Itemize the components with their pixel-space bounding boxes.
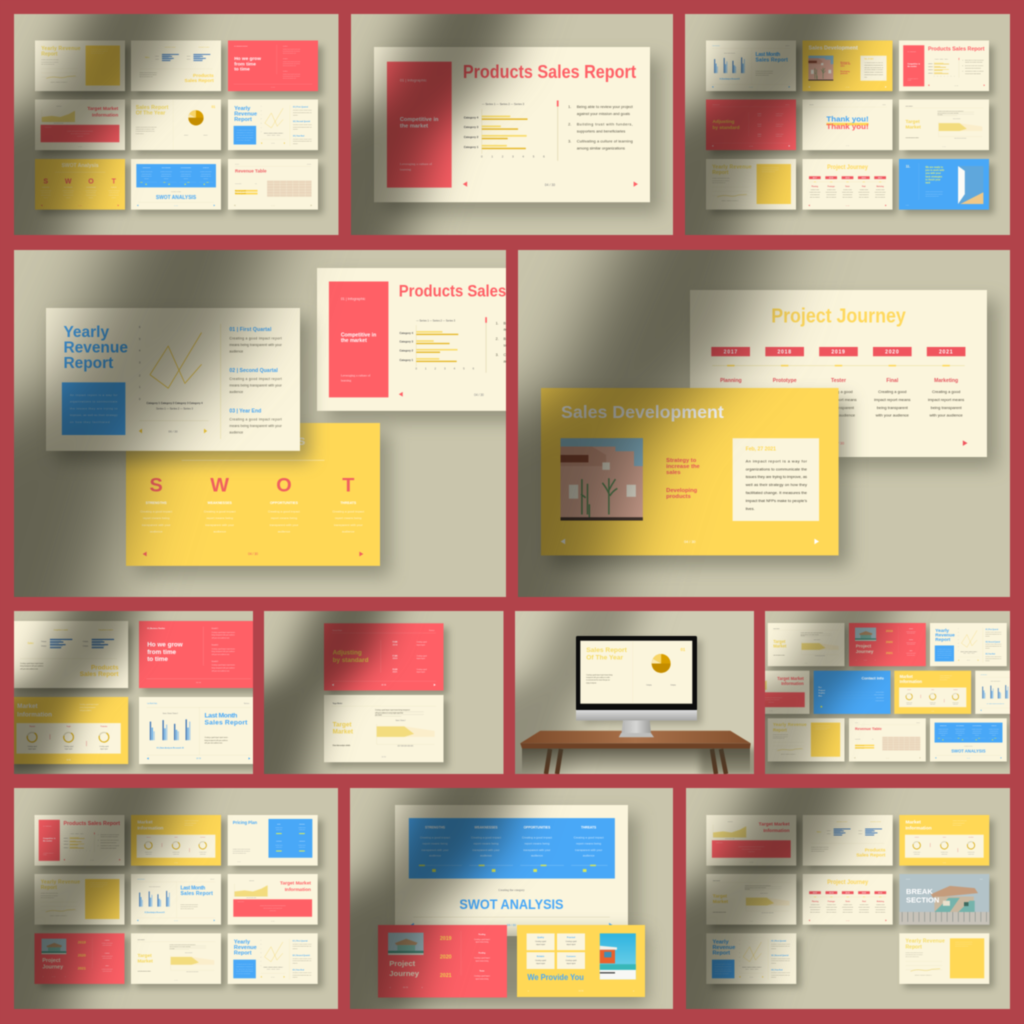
monitor xyxy=(576,636,697,737)
slide: Products Sales Report xyxy=(374,47,650,202)
slide: Target Market xyxy=(899,100,989,150)
slide: Sales Development xyxy=(541,388,839,555)
slide: Revenue Table xyxy=(228,159,318,210)
screen: Sales Report Of The Year xyxy=(580,641,692,704)
slide: Target Market Information xyxy=(733,671,810,714)
slide: Project Journey red xyxy=(378,925,507,998)
slide: Ho we grow from time to time xyxy=(228,40,318,91)
slide: Yearly Revenue Report xyxy=(46,308,300,451)
slide: Target Market Information xyxy=(706,815,796,866)
slide: Project Journey red xyxy=(34,933,124,984)
panel: overview of slides, bottom right xyxy=(573,733,1010,1024)
slide: Market Information xyxy=(131,815,221,866)
slide: We Provide You xyxy=(517,925,645,997)
panel: large Products Sales Report xyxy=(350,13,674,236)
slide: Sales Report Of The Year xyxy=(131,100,221,150)
panel: Yearly Revenue, Products, SWOT xyxy=(13,249,507,598)
slide: Market Information xyxy=(9,697,128,764)
slide: Contact Info xyxy=(814,671,890,714)
slide: Last Month Sales Report xyxy=(975,671,1024,714)
slide: Project Journey xyxy=(803,874,893,925)
slide: Pricing Plan xyxy=(228,815,318,866)
slide: Last Month Sales Report xyxy=(131,874,221,925)
slide: Products Sales Report xyxy=(34,815,124,866)
panel: desktop monitor on table xyxy=(514,610,755,775)
panel: SWOT Analysis, Project Journey, We Provide You xyxy=(237,733,673,1024)
slide: blue statement xyxy=(899,159,989,210)
slide: Ho we grow from time to time xyxy=(139,621,258,688)
slide: Last Month Sales Report xyxy=(706,40,796,91)
slide: Yearly Revenue Report xyxy=(930,623,1007,666)
panel: overview of slides, third row right xyxy=(679,570,1024,815)
slide: Yearly Revenue Report yellow xyxy=(899,933,989,984)
slide: Market Information xyxy=(899,815,989,866)
slide: SWOT Analysis xyxy=(131,159,221,210)
slide: Products Sales Report xyxy=(9,621,128,688)
table xyxy=(520,731,751,774)
slide: Yearly Revenue Report xyxy=(228,933,318,984)
slide: Break Section xyxy=(899,874,989,925)
slide: Adjusting by standard xyxy=(706,100,796,150)
slide: Project Journey xyxy=(690,290,987,457)
slide: Yearly Revenue Report blue xyxy=(228,100,318,150)
slide: Thank you xyxy=(802,100,892,150)
slide: SWOT Analysis xyxy=(930,718,1007,762)
panel: nine slide overview, top right xyxy=(684,13,1011,236)
slide: Adjusting by standard xyxy=(324,623,444,691)
slide: Products Sales Report xyxy=(131,40,221,91)
slide: Yearly Revenue Report xyxy=(35,40,125,91)
slide: SWOT letters xyxy=(35,159,125,210)
slide: Project Journey red xyxy=(849,623,926,666)
slide: Yearly Revenue Report yellow xyxy=(34,874,124,925)
slide: Target Market xyxy=(706,874,796,925)
slide: Revenue Table xyxy=(849,718,926,762)
panel: two slides xyxy=(263,610,504,775)
slide: Sales Development xyxy=(802,40,892,91)
slide: Target Market Information xyxy=(228,874,318,925)
panel: nine slide overview, bottom left xyxy=(0,733,338,1024)
slide: Project Journey xyxy=(802,159,892,210)
slide: Target Market xyxy=(324,695,444,762)
slide: Yearly Revenue Report yellow xyxy=(768,718,844,762)
slide: Market Information xyxy=(894,671,971,714)
slide: SWOT Analysis xyxy=(395,805,628,936)
slide: Yearly Revenue Report xyxy=(706,933,796,984)
panel: nine slide overview, top left xyxy=(13,13,340,236)
slide: Products Sales Report cropped xyxy=(316,268,507,412)
slide: SWOT xyxy=(126,423,380,566)
panel: four slides, third row left xyxy=(13,610,254,775)
slide: Products Sales Report xyxy=(803,815,893,866)
slide: Target Market Information xyxy=(35,100,125,150)
slide: Yearly Revenue Report yellow xyxy=(706,159,796,210)
slide: Products Sales Report xyxy=(899,40,989,91)
panel: Project Journey and Sales Development xyxy=(517,249,1011,598)
slide: Target Market xyxy=(768,623,844,666)
slide: Last Month Sales Report xyxy=(139,697,258,764)
slide: Target Market xyxy=(131,933,221,984)
